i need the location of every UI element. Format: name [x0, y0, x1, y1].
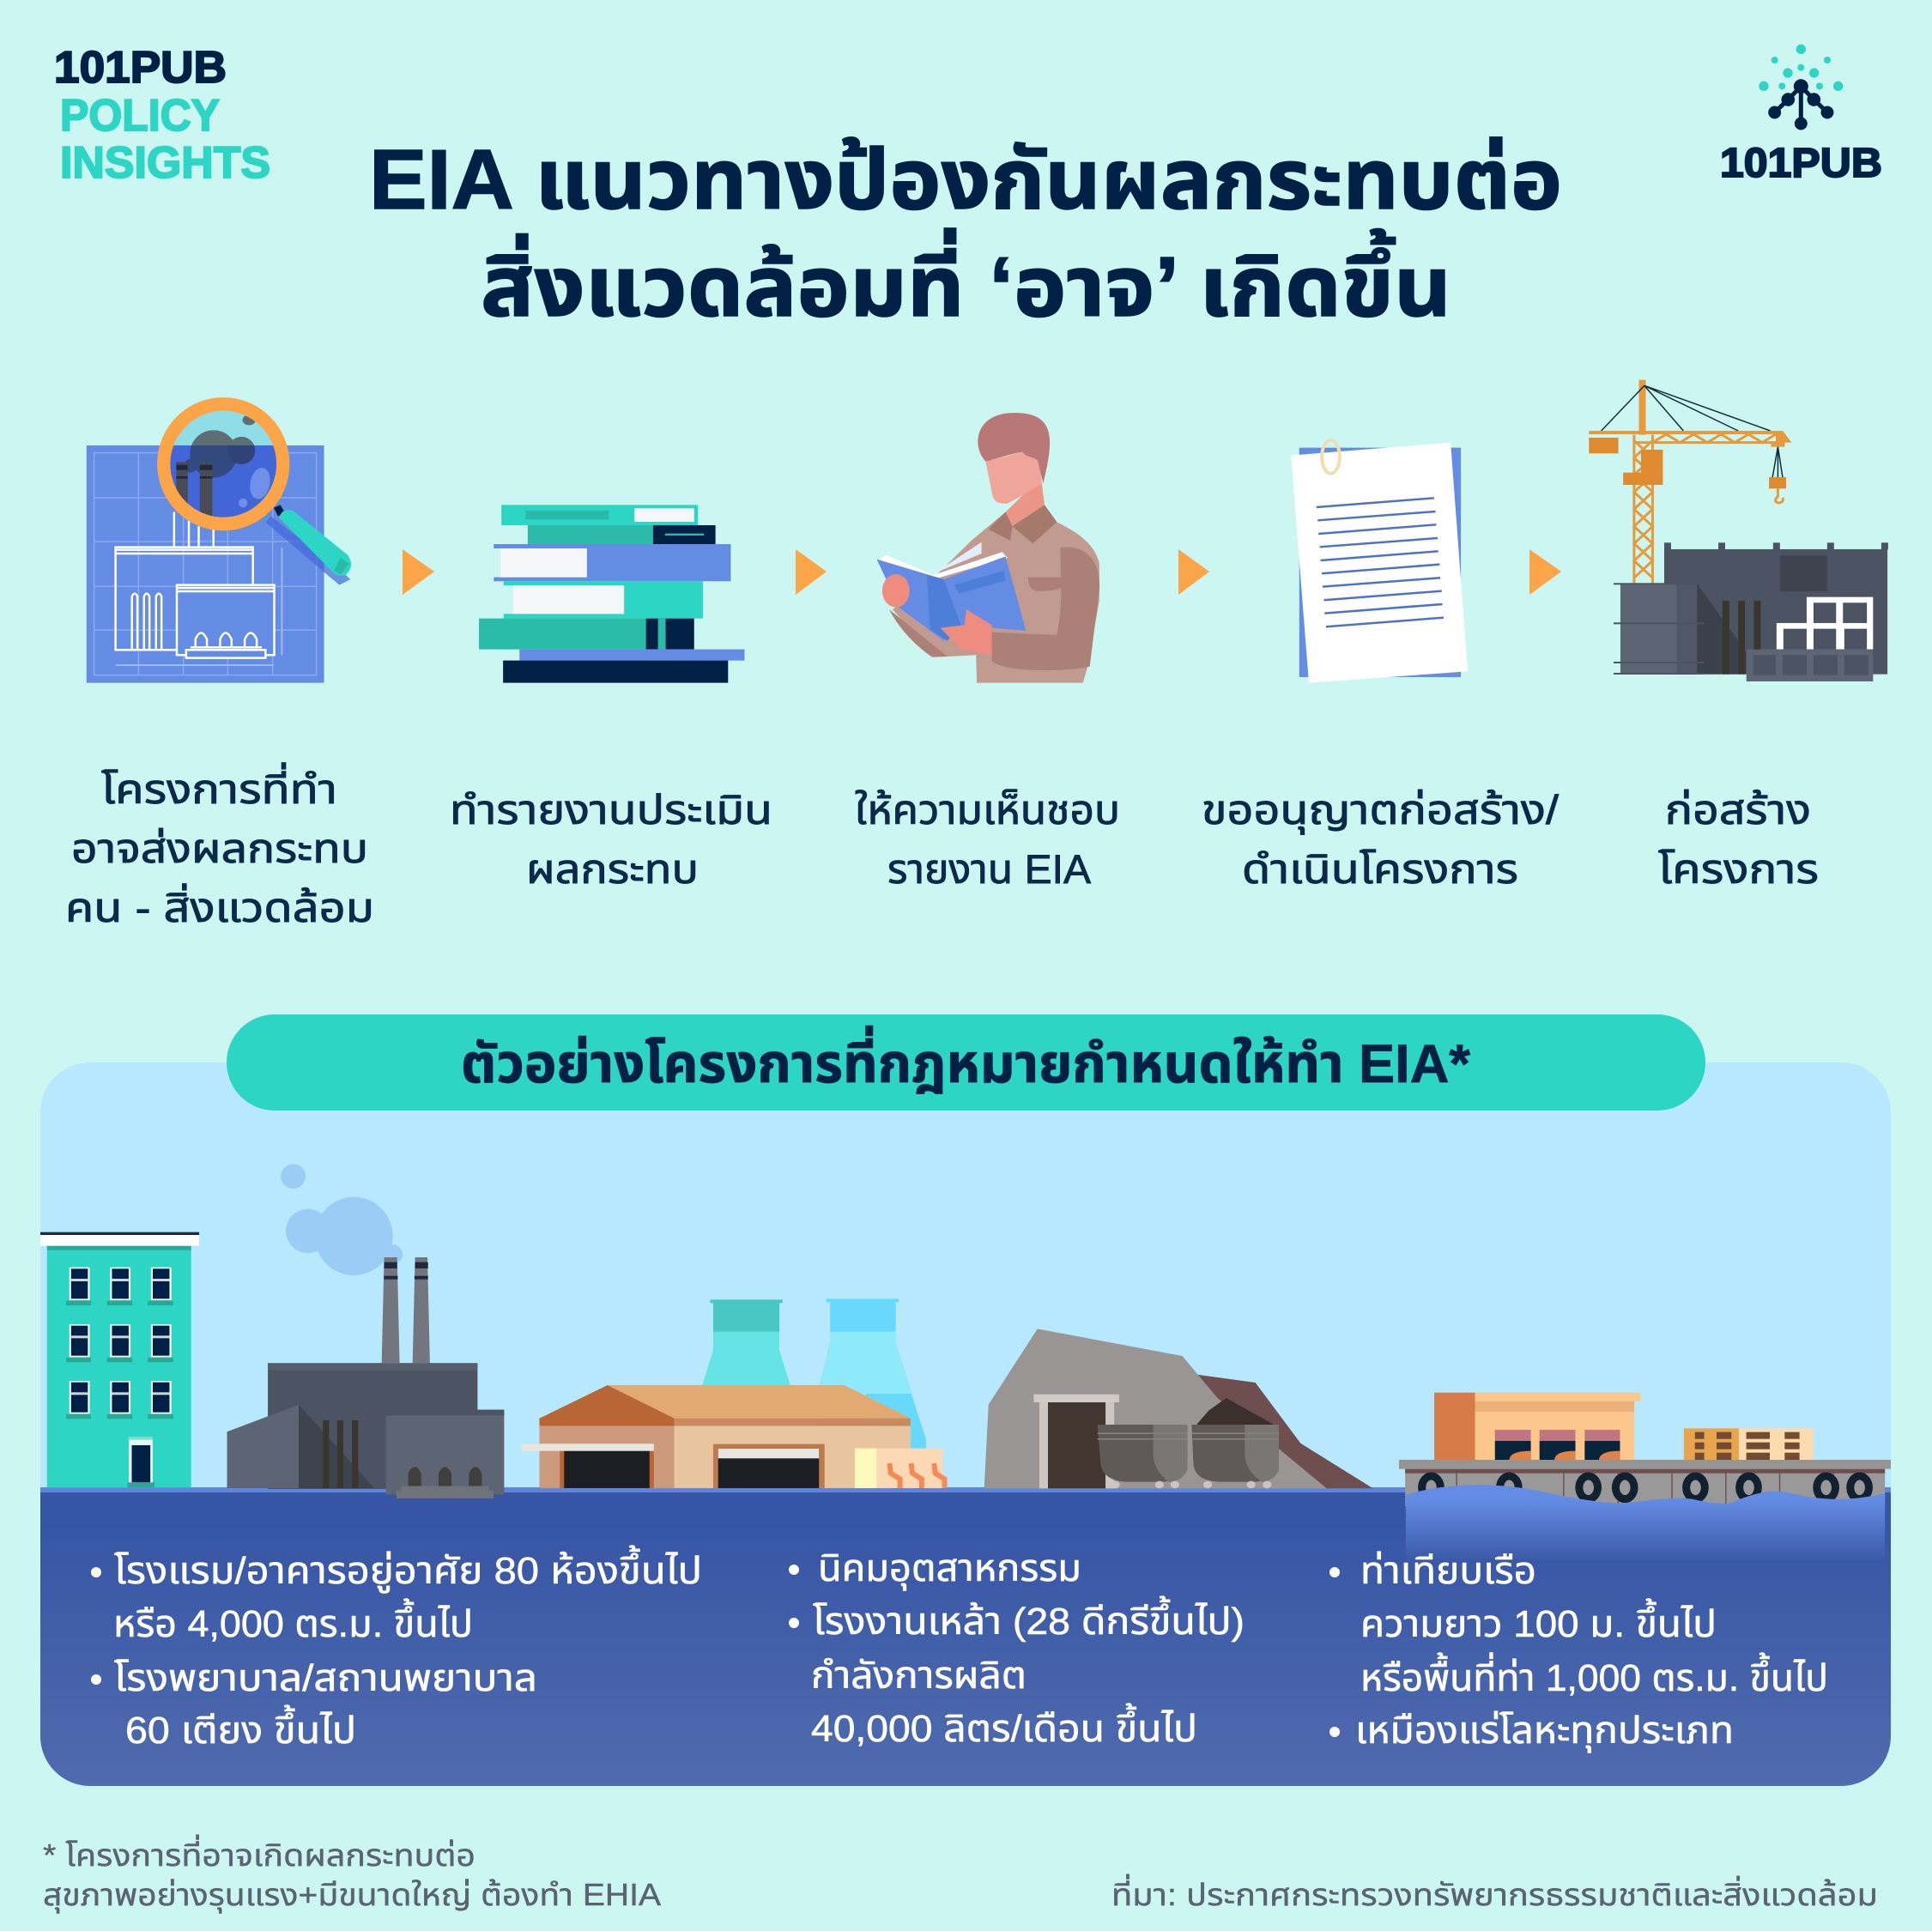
- footnote: สุขภาพอย่างรุนแรง+มีขนาดใหญ่ ต้องทำ EHIA: [43, 1877, 661, 1913]
- step label 2: [450, 787, 772, 892]
- section heading pill: ตัวอย่างโครงการที่กฎหมายกำหนดให้ทำ EIA*: [461, 1026, 1470, 1094]
- logo: 101PUB Policy Insights: 101PUB: [54, 43, 227, 93]
- arrow 4: [1529, 549, 1561, 595]
- step label 3: รายงาน EIA: [887, 846, 1092, 892]
- step label 1: โครงการที่ทำ: [101, 762, 337, 812]
- step label 5: ก่อสร้าง: [1665, 787, 1811, 832]
- title: [369, 132, 1562, 334]
- arrow 3: [1178, 549, 1209, 595]
- step label 1: [65, 762, 374, 930]
- illustration: port pier with warehouse: [1399, 1393, 1891, 1559]
- icon: blueprint with magnifying glass: [87, 397, 351, 683]
- illustration: factory with chimneys and smoke: [227, 1164, 504, 1498]
- list column 3: [1329, 1550, 1828, 1753]
- arrow 2: [796, 549, 827, 595]
- list column 1: หรือ 4,000 ตร.ม. ขึ้นไป: [113, 1598, 473, 1645]
- footnote: [43, 1834, 661, 1913]
- logo: 101PUB Policy Insights: INSIGHTS: [60, 138, 270, 188]
- logo: 101PUB network mark: 101PUB: [1720, 141, 1882, 186]
- footnote: * โครงการที่อาจเกิดผลกระทบต่อ: [43, 1834, 475, 1873]
- list column 1: 60 เตียง ขึ้นไป: [125, 1704, 356, 1752]
- icon: tower crane and building site: [1589, 380, 1888, 681]
- list column 2: 40,000 ลิตร/เดือน ขึ้นไป: [811, 1703, 1197, 1750]
- arrow 1: [403, 549, 434, 595]
- title: สิ่งแวดล้อมที่ ‘อาจ’ เกิดขึ้น: [481, 228, 1451, 334]
- illustration: distillery with cooling towers: [522, 1298, 945, 1488]
- step label 5: [1658, 787, 1819, 892]
- logo: 101PUB network mark: [1720, 45, 1882, 186]
- step label 4: ดำเนินโครงการ: [1242, 846, 1518, 892]
- step label 1: คน - สิ่งแวดล้อม: [65, 883, 374, 930]
- list column 3: ความยาว 100 ม. ขึ้นไป: [1360, 1598, 1717, 1645]
- panel: example projects scene: [40, 1062, 1891, 1786]
- step label 1: อาจส่งผลกระทบ: [71, 826, 368, 871]
- icon: person reading a book: [877, 413, 1099, 683]
- step label 3: ให้ความเห็นชอบ: [855, 787, 1120, 832]
- logo: 101PUB Policy Insights: POLICY: [60, 91, 220, 141]
- icon: permit document with paperclip: [1291, 440, 1468, 683]
- list column 2: กำลังการผลิต: [811, 1655, 1027, 1697]
- logo: 101PUB Policy Insights: [54, 43, 270, 188]
- source note: ที่มา: ประกาศกระทรวงทรัพยากรธรรมชาติและสิ่งแวดล้อม: [1111, 1873, 1878, 1912]
- step label 5: โครงการ: [1658, 846, 1819, 892]
- step label 4: ขออนุญาตก่อสร้าง/: [1202, 787, 1560, 834]
- list column 3: หรือพื้นที่ท่า 1,000 ตร.ม. ขึ้นไป: [1360, 1652, 1828, 1699]
- title: EIA แนวทางป้องกันผลกระทบต่อ: [369, 132, 1562, 227]
- step label 3: [855, 787, 1120, 892]
- step label 4: [1202, 787, 1560, 892]
- step label 2: ผลกระทบ: [526, 846, 699, 892]
- section heading pill: [227, 1014, 1705, 1111]
- list column 2: นิคมอุตสาหกรรม: [818, 1547, 1081, 1591]
- illustration: apartment building: [40, 1232, 199, 1487]
- icon: stack of books: [479, 505, 744, 683]
- list column 1: โรงพยาบาล/สถานพยาบาล: [114, 1657, 537, 1699]
- list column 1: [91, 1545, 702, 1752]
- list column 3: ท่าเทียบเรือ: [1360, 1550, 1536, 1592]
- list column 3: เหมืองแร่โลหะทุกประเภท: [1355, 1710, 1734, 1753]
- list column 2: โรงงานเหล้า (28 ดีกรีขึ้นไป): [813, 1595, 1245, 1643]
- list column 1: โรงแรม/อาคารอยู่อาศัย 80 ห้องขึ้นไป: [114, 1545, 702, 1594]
- step label 2: ทำรายงานประเมิน: [450, 787, 772, 832]
- list column 2: [789, 1547, 1245, 1750]
- illustration: mine with ore carts: [984, 1329, 1373, 1488]
